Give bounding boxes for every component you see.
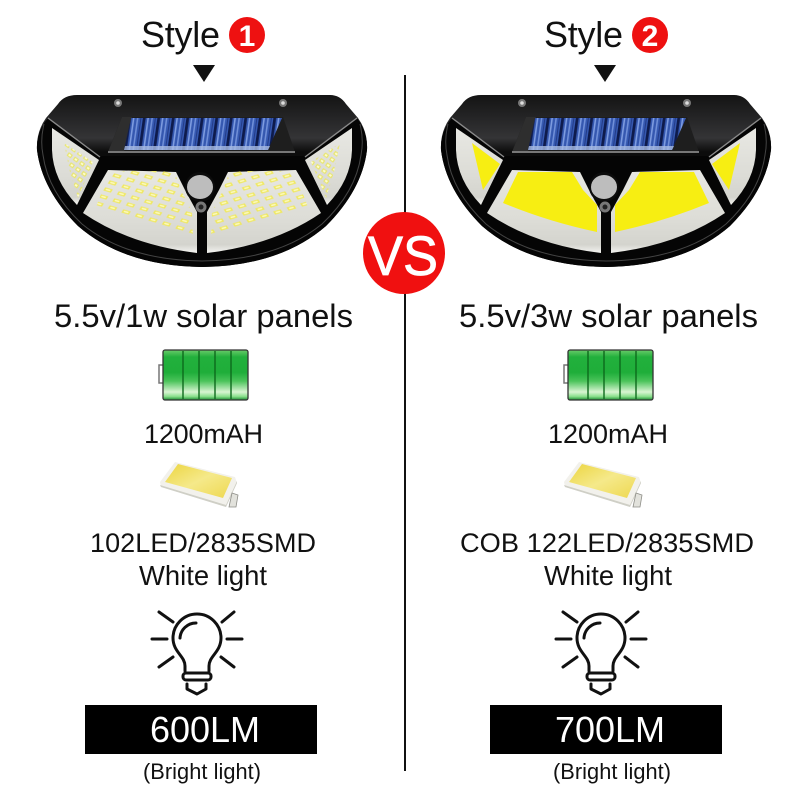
text: capacity: 1200mAH <box>144 419 263 449</box>
text: LED type <box>460 527 754 591</box>
icon: SMD LED chip <box>160 462 238 507</box>
VS badge <box>363 212 445 294</box>
heading: style 1: Style <box>141 14 220 55</box>
text: bright light: (Bright light) <box>553 759 671 784</box>
heading: style 1 <box>141 14 265 55</box>
text: bright light: (Bright light) <box>143 759 261 784</box>
heading: style 2: 2 <box>642 20 658 53</box>
lamp: COB <box>441 95 771 267</box>
icon: battery <box>159 350 248 400</box>
text: LED type: COB 122LED/2835SMD <box>460 527 754 558</box>
text: solar panels: 5.5v/3w solar panels <box>459 297 758 334</box>
icon: battery <box>564 350 653 400</box>
arrow: down <box>193 65 215 82</box>
VS badge: VS <box>368 224 438 287</box>
text: LED type: 102LED/2835SMD <box>90 528 316 558</box>
panel: style 1 <box>37 14 367 784</box>
heading: style 2 <box>544 14 668 55</box>
text: solar panels: 5.5v/1w solar panels <box>54 297 353 334</box>
icon: light bulb <box>152 612 242 694</box>
icon: SMD LED chip <box>564 462 642 507</box>
text: LED type <box>90 528 316 591</box>
arrow: down <box>594 65 616 82</box>
icon: light bulb <box>556 612 646 694</box>
lumen bar: 700LM <box>555 709 665 750</box>
lamp: 102 LED <box>37 95 367 267</box>
heading: style 2: Style <box>544 14 623 55</box>
heading: style 1: 1 <box>239 20 255 53</box>
lumen bar: 600LM <box>150 709 260 750</box>
lumen bar <box>490 705 722 754</box>
text: capacity: 1200mAH <box>548 419 668 449</box>
lumen bar <box>85 705 317 754</box>
text: LED type: White light <box>139 560 267 591</box>
panel: style 2 <box>441 14 771 784</box>
text: LED type: White light <box>544 560 672 591</box>
divider line <box>404 75 406 771</box>
